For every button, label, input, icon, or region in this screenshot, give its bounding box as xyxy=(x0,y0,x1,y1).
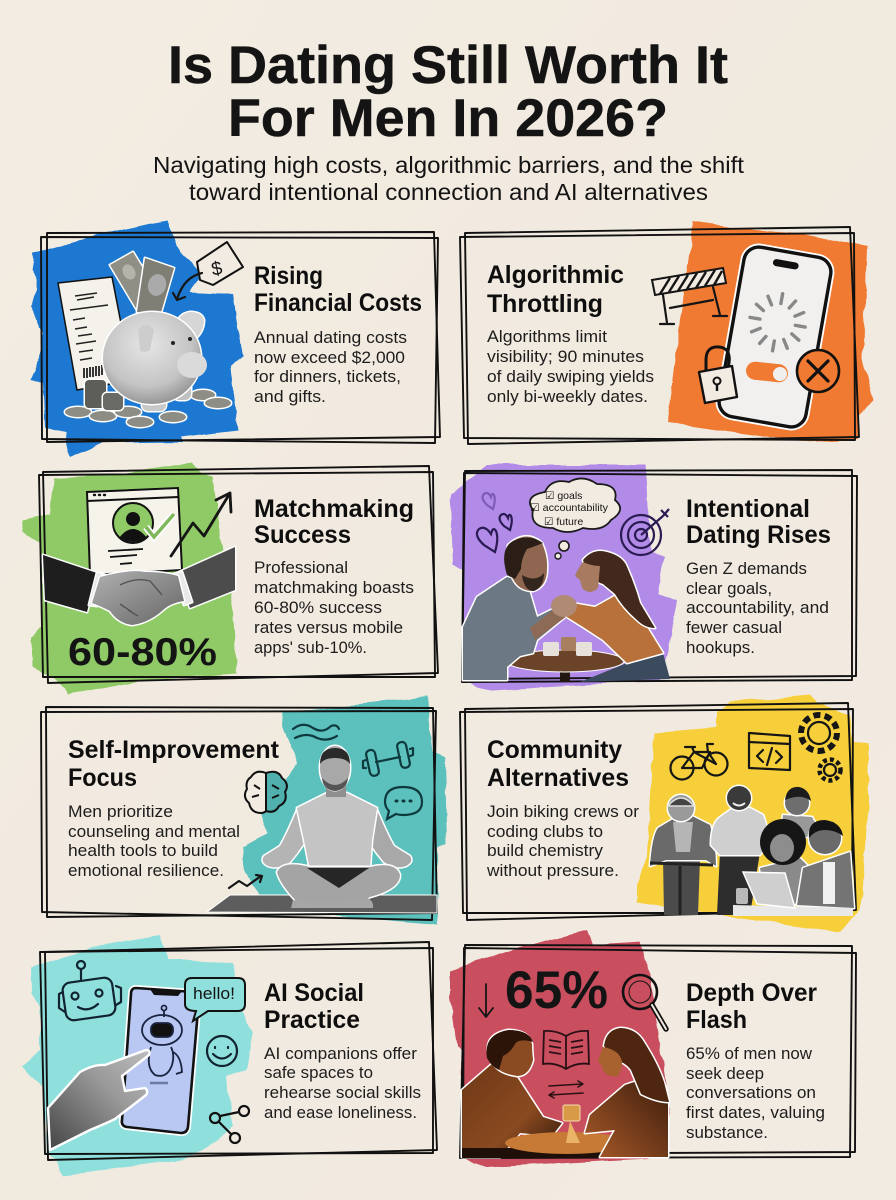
woman xyxy=(567,551,670,682)
table with candle glow xyxy=(462,1105,667,1158)
body text xyxy=(686,559,829,657)
blue paint swatch xyxy=(30,220,243,458)
panel frame xyxy=(40,942,437,1160)
orange paint swatch xyxy=(667,222,873,442)
piggy bank xyxy=(103,312,207,411)
heading: Matchmaking xyxy=(254,495,414,523)
body text: Men prioritize xyxy=(68,802,173,821)
rider in t-shirt xyxy=(711,786,767,915)
body text: without pressure. xyxy=(486,861,619,880)
icon: open book xyxy=(543,1031,589,1069)
heading: Self-Improvement xyxy=(68,736,280,764)
thought cloud: ☑ accountability xyxy=(530,502,609,514)
icon: waves xyxy=(293,725,339,740)
heading: Flash xyxy=(686,1006,747,1034)
icon: code window xyxy=(749,733,790,770)
heading xyxy=(254,262,422,317)
heading xyxy=(487,736,629,792)
body text: only bi-weekly dates. xyxy=(487,387,648,406)
yoga mat xyxy=(207,895,437,913)
body text: AI companions offer xyxy=(264,1044,417,1063)
body text: rehearse social skills xyxy=(264,1083,421,1102)
table and coffee xyxy=(506,637,624,682)
icon: target and dart xyxy=(621,509,669,555)
stat: 65%: 65% xyxy=(505,961,608,1020)
panel: depth over flash xyxy=(450,930,856,1167)
icon: price tag with arrow: $ xyxy=(210,258,225,281)
panel: algorithmic throttling xyxy=(460,222,873,444)
body text: for dinners, tickets, xyxy=(254,367,401,386)
icon: gears xyxy=(801,715,840,780)
body text: hookups. xyxy=(686,638,755,657)
body text: Annual dating costs xyxy=(254,328,407,347)
icon: smiley xyxy=(207,1036,237,1066)
body text: accountability, and xyxy=(686,598,829,617)
icon: receipt xyxy=(58,277,132,390)
speech bubble: hello xyxy=(185,978,245,1021)
icon: padlock xyxy=(699,347,737,403)
body text: fewer casual xyxy=(686,618,782,637)
icons: hearts xyxy=(477,493,512,552)
body text: matchmaking boasts xyxy=(254,578,414,597)
icon: cash bills xyxy=(110,252,174,316)
body text: 60-80% success xyxy=(254,598,382,617)
heading xyxy=(487,261,624,318)
subtitle: toward intentional connection and AI alternatives xyxy=(189,179,708,205)
panel frame xyxy=(460,703,856,920)
body text: Join biking crews or xyxy=(487,802,639,821)
body text xyxy=(254,558,414,657)
heading: Intentional xyxy=(686,495,810,523)
man xyxy=(463,536,567,680)
body text: visibility; 90 minutes xyxy=(487,347,644,366)
thought cloud xyxy=(530,478,620,559)
phone with chatbot xyxy=(122,988,199,1133)
body text: substance. xyxy=(686,1123,768,1142)
red paint swatch xyxy=(450,930,670,1167)
purple paint swatch xyxy=(450,465,677,690)
yellow paint swatch xyxy=(637,695,868,932)
body text: 65% of men now xyxy=(686,1044,813,1063)
woman in warm light xyxy=(585,1028,669,1157)
panel: matchmaking success xyxy=(22,462,438,695)
body text xyxy=(486,802,639,880)
laptop on table xyxy=(733,872,853,916)
light teal paint swatch xyxy=(23,935,253,1175)
man with laptop xyxy=(797,820,854,908)
subtitle xyxy=(153,152,744,205)
heading: Focus xyxy=(68,764,137,792)
heading: Community xyxy=(487,736,622,764)
panel: rising financial costs xyxy=(30,220,440,458)
body text: Algorithms limit xyxy=(487,327,607,346)
body text: conversations on xyxy=(686,1083,816,1102)
body text: emotional resilience. xyxy=(68,861,224,880)
woman with curly hair xyxy=(760,819,812,905)
stat: 60-80%: 60-80% xyxy=(68,631,217,674)
body text: Professional xyxy=(254,558,348,577)
body text: health tools to build xyxy=(68,841,218,860)
thought cloud: ☑ goals xyxy=(545,490,582,502)
heading: Algorithmic xyxy=(487,261,624,289)
heading: Dating Rises xyxy=(686,521,831,549)
body text: and ease loneliness. xyxy=(264,1103,417,1122)
body text: and gifts. xyxy=(254,387,326,406)
body text xyxy=(487,327,654,406)
icon: chatbot on phone xyxy=(142,1006,182,1083)
body text: of daily swiping yields xyxy=(487,367,654,386)
teal paint swatch xyxy=(243,697,447,925)
panel frame xyxy=(39,466,438,683)
hand pointing xyxy=(48,1050,150,1150)
title xyxy=(168,36,728,148)
panel: ai social practice xyxy=(23,935,437,1175)
body text xyxy=(264,1044,421,1122)
subtitle: Navigating high costs, algorithmic barriers, and the shift xyxy=(153,152,744,178)
green paint swatch xyxy=(22,462,237,695)
panel: community alternatives xyxy=(460,695,868,932)
body text: counseling and mental xyxy=(68,822,240,841)
heading: Depth Over xyxy=(686,979,817,1007)
arrow: small trend xyxy=(229,875,262,888)
heading: Practice xyxy=(264,1006,360,1034)
icon: barrier xyxy=(652,268,727,324)
heading: Throttling xyxy=(487,290,603,318)
heading: Rising xyxy=(254,262,323,290)
title: Is Dating Still Worth It xyxy=(168,36,728,95)
icon: cancel circle xyxy=(797,350,839,392)
panel: intentional dating rises xyxy=(450,465,857,690)
body text xyxy=(254,328,407,406)
icon: speech bubble xyxy=(385,787,422,819)
body text: build chemistry xyxy=(487,841,604,860)
body text: apps' sub-10%. xyxy=(254,638,367,657)
icon: bicycle xyxy=(670,744,728,780)
icon: magnifying glass xyxy=(623,975,666,1029)
icon: price tag with arrow xyxy=(173,242,243,300)
clasped hands xyxy=(551,595,577,617)
icon: dumbbell xyxy=(363,741,413,777)
body text: seek deep xyxy=(686,1064,764,1083)
toggle switch xyxy=(745,361,789,383)
heading: Alternatives xyxy=(487,764,629,792)
speech bubble: hello: hello! xyxy=(193,984,235,1003)
meditating man xyxy=(263,746,411,908)
icon: loading spinner xyxy=(745,289,810,356)
coins xyxy=(65,380,231,427)
icon: share nodes xyxy=(210,1106,249,1143)
cyclist xyxy=(650,795,716,915)
thought cloud: ☑ future xyxy=(544,516,583,528)
heading xyxy=(264,979,364,1034)
handshake xyxy=(43,547,235,625)
heading xyxy=(254,495,414,549)
panel frame xyxy=(41,707,437,920)
icon: smartphone xyxy=(717,245,833,429)
man in warm light xyxy=(462,1030,562,1157)
title: For Men In 2026? xyxy=(228,89,668,148)
body text: first dates, valuing xyxy=(686,1103,825,1122)
body text xyxy=(686,1044,825,1142)
panel: self-improvement focus xyxy=(41,697,447,925)
panel frame xyxy=(462,470,857,682)
panel frame xyxy=(41,232,440,443)
panel frame xyxy=(460,227,859,444)
icon: brain xyxy=(245,772,287,813)
panel frame xyxy=(460,945,856,1158)
body text: Gen Z demands xyxy=(686,559,807,578)
icon: robot outline xyxy=(59,961,121,1021)
icon: exchange arrows xyxy=(549,1081,583,1098)
body text: clear goals, xyxy=(686,579,772,598)
woman behind laptop xyxy=(780,787,822,840)
body text xyxy=(68,802,240,880)
heading xyxy=(686,979,817,1034)
heading: Financial Costs xyxy=(254,289,422,317)
body text: rates versus mobile xyxy=(254,618,403,637)
heading: Success xyxy=(254,521,351,549)
body text: coding clubs to xyxy=(487,822,603,841)
body text: safe spaces to xyxy=(264,1063,373,1082)
body text: now exceed $2,000 xyxy=(254,348,405,367)
icon: down arrow xyxy=(479,984,493,1017)
heading xyxy=(686,495,831,549)
heading: AI Social xyxy=(264,979,364,1007)
profile window xyxy=(87,488,182,575)
arrow: rising trend xyxy=(171,493,231,556)
heading xyxy=(68,736,280,792)
